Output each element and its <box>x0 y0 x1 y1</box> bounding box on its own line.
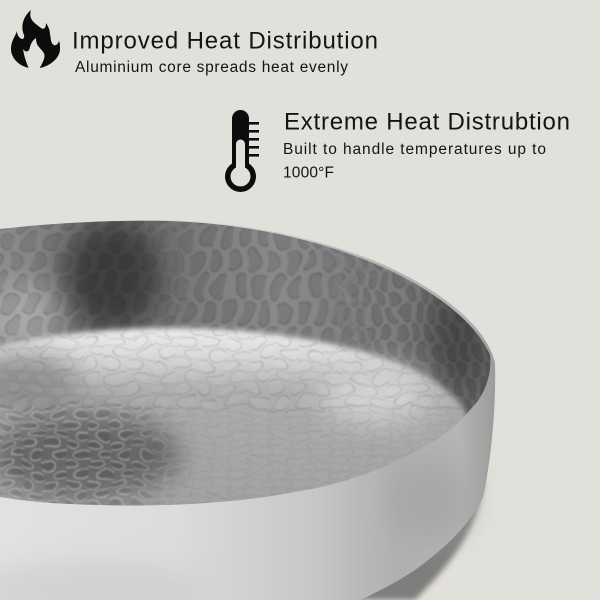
text: built to handle temperatures: 1000°F <box>283 164 334 182</box>
pan body exterior <box>0 220 495 600</box>
pan <box>0 220 496 600</box>
interior floor <box>0 324 468 506</box>
icon: thermometer <box>225 110 259 192</box>
text: aluminium core spreads heat evenly: Aluminium core spreads heat evenly <box>75 59 348 76</box>
pan interior hammered surface <box>0 220 490 506</box>
pan cast shadow <box>330 480 484 600</box>
heading: improved heat distribution: Improved Heat Distribution <box>72 28 378 54</box>
interior wall <box>0 220 490 445</box>
heading: extreme heat distrubtion: Extreme Heat Distrubtion <box>284 108 570 136</box>
text: built to handle temperatures: Built to handle temperatures up to <box>283 141 546 158</box>
text: built to handle temperatures <box>283 141 546 182</box>
icon: flame <box>11 10 60 69</box>
